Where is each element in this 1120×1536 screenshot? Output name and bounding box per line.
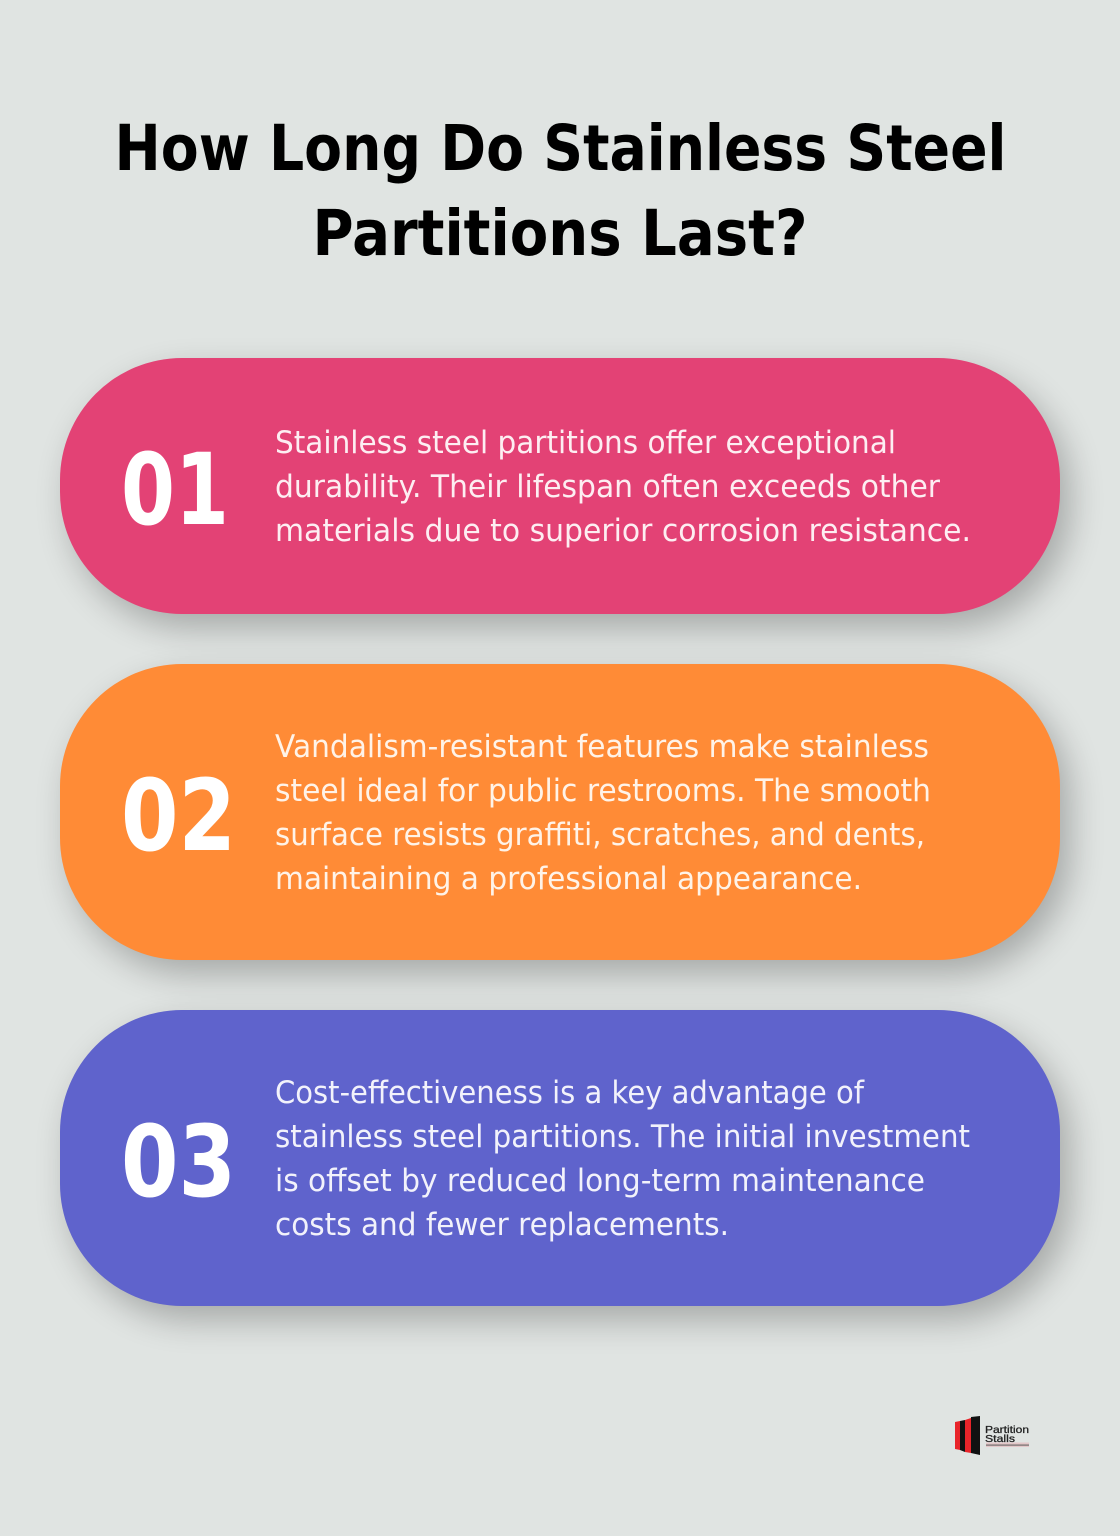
text block: point 01 [275,425,971,549]
text block: point 02: Vandalism-resistant features make stainless [275,729,929,765]
text block: point 02: surface resists graffiti, scratches, and dents, [275,817,925,853]
pill: pink background [60,358,1060,614]
panel: point 01 [60,358,1070,628]
text block: point 01: materials due to superior corrosion resistance. [275,513,971,549]
text block: point 01: durability. Their lifespan often exceeds other [275,469,940,505]
icon: partition panels [955,1416,980,1455]
wordmark [985,1424,1029,1447]
number 03: 03 [121,1105,236,1220]
number 01: 01 [121,433,229,548]
pill: orange background [60,664,1060,960]
wordmark: Stalls [985,1433,1015,1445]
pill: purple background [60,1010,1060,1306]
number 02: 02 [121,759,236,874]
text block: point 03: Cost-effectiveness is a key advantage of [275,1075,865,1111]
panel: point 02 [60,664,1070,974]
text block: point 03: is offset by reduced long-term maintenance [275,1163,925,1199]
title: How Long Do Stainless Steel [114,112,1006,185]
wordmark: Partition [985,1424,1029,1436]
title [114,112,1006,270]
text block: point 03: costs and fewer replacements. [275,1207,729,1243]
title: Partitions Last? [312,197,808,270]
text block: point 02 [275,729,931,897]
panel: point 03 [60,1010,1070,1320]
text block: point 01: Stainless steel partitions offer exceptional [275,425,896,461]
logo: Partition Stalls [955,1416,1029,1455]
text block: point 03 [275,1075,970,1243]
text block: point 02: steel ideal for public restrooms. The smooth [275,773,931,809]
text block: point 03: stainless steel partitions. The initial investment [275,1119,970,1155]
text block: point 02: maintaining a professional appearance. [275,861,862,897]
